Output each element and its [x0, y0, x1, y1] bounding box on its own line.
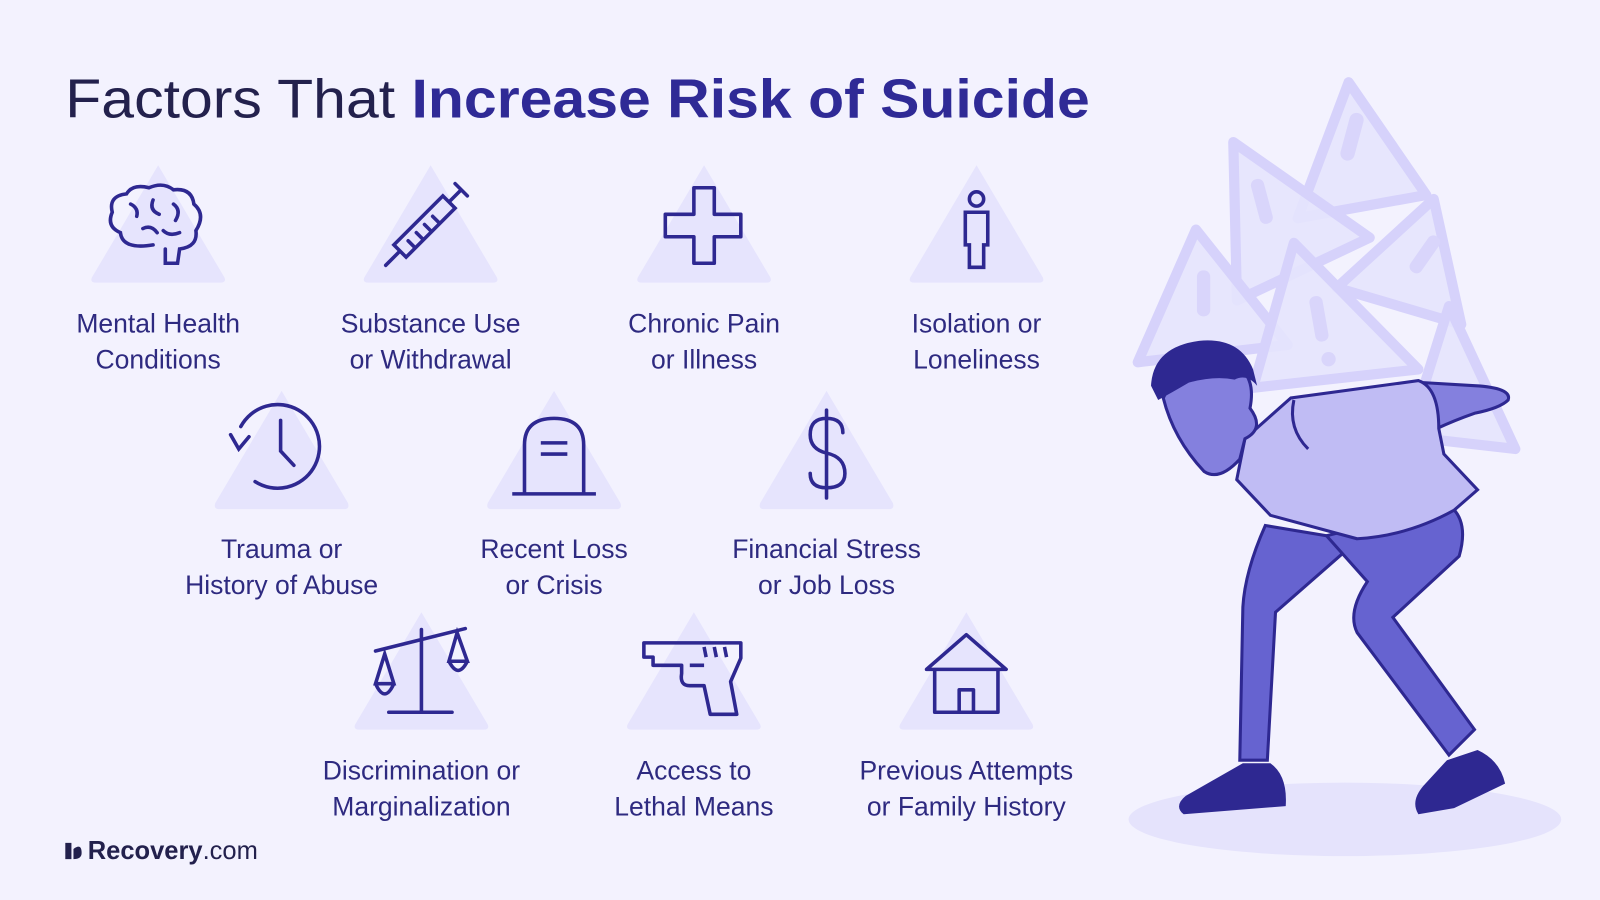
factor: substance use: Substance Use	[341, 309, 521, 339]
factor: substance use: or Withdrawal	[350, 344, 512, 374]
factor: chronic pain: Chronic Pain	[628, 309, 780, 339]
factor: isolation: Isolation or	[912, 309, 1042, 339]
factor: mental health: Mental Health	[76, 309, 240, 339]
factor: financial stress: or Job Loss	[758, 570, 895, 600]
factor: trauma: History of Abuse	[185, 570, 378, 600]
head	[1163, 361, 1257, 475]
factor: mental health	[76, 165, 240, 374]
factor: discrimination: Discrimination or	[323, 756, 520, 786]
factor: financial stress: Financial Stress	[732, 534, 921, 564]
factor: recent loss: Recent Loss	[480, 534, 628, 564]
illustration: person carrying warning signs	[1129, 74, 1561, 856]
factor: isolation	[910, 165, 1043, 374]
factor: isolation: Loneliness	[913, 344, 1040, 374]
factor: lethal means	[614, 612, 773, 821]
shirt	[1237, 381, 1478, 539]
factor: previous attempts: or Family History	[867, 791, 1067, 821]
factor: financial stress	[732, 391, 921, 600]
factor: lethal means: Access to	[636, 756, 751, 786]
factor: chronic pain: or Illness	[651, 344, 757, 374]
warning signs	[1138, 74, 1515, 449]
factor: recent loss	[480, 391, 628, 600]
title: Factors That Increase Risk of Suicide	[65, 67, 1090, 129]
factor: previous attempts	[859, 612, 1073, 821]
factor: lethal means: Lethal Means	[614, 791, 773, 821]
factor: trauma	[185, 391, 378, 600]
shoes	[1179, 763, 1286, 814]
factor: trauma: Trauma or	[221, 534, 342, 564]
factor: substance use	[341, 165, 521, 374]
factor: discrimination: Marginalization	[332, 791, 511, 821]
arm behind back	[1423, 383, 1509, 429]
factor: chronic pain	[628, 165, 780, 374]
factor: previous attempts: Previous Attempts	[859, 756, 1073, 786]
pants	[1240, 526, 1357, 760]
logo: Recovery.com	[88, 837, 258, 865]
factor: discrimination	[323, 612, 520, 821]
factor: mental health: Conditions	[96, 344, 221, 374]
factor: recent loss: or Crisis	[505, 570, 603, 600]
